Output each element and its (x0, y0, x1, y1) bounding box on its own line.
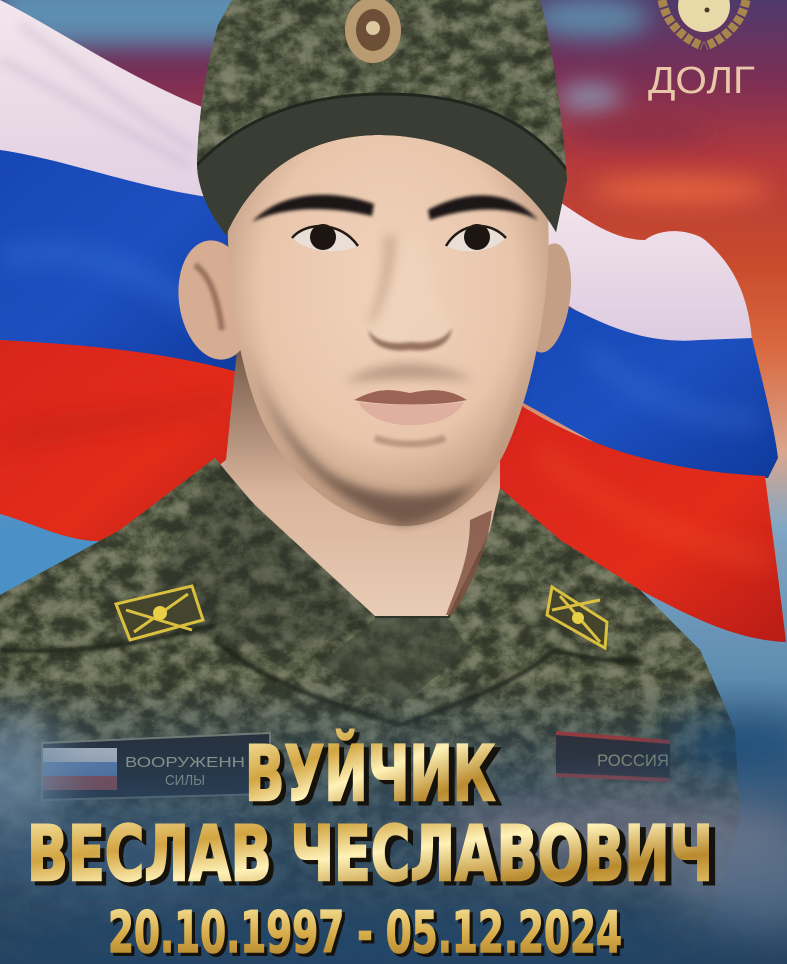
ear: left (171, 235, 261, 365)
flag: right side (490, 192, 786, 642)
moustache shadow (345, 364, 475, 382)
surname: ВУЙЧИК (249, 733, 501, 822)
chest patch: Russia (556, 733, 670, 780)
face (228, 125, 549, 526)
cap (190, 0, 575, 240)
eyebrow: left (252, 195, 374, 222)
jacket shading (150, 458, 375, 650)
logo: ДОЛГ emblem (648, 0, 755, 102)
surname (245, 729, 501, 822)
collar insignia: right (547, 587, 607, 648)
lips (354, 390, 467, 444)
chest patch: Russia: РОССИЯ (597, 751, 669, 770)
chest patch: armed forces (42, 733, 270, 800)
surname: ВУЙЧИК (245, 729, 495, 818)
flag: left side (0, 0, 252, 541)
logo wordmark: ДОЛГ (648, 60, 755, 102)
eye: left (292, 224, 358, 251)
neck (225, 340, 500, 616)
eyebrow: right (428, 195, 538, 220)
chest patch: armed forces: ВООРУЖЕНН (125, 754, 245, 771)
collar insignia: left (116, 586, 203, 640)
eye: right (446, 224, 506, 251)
cap brim (197, 94, 567, 240)
uniform: camouflage jacket (0, 458, 740, 911)
icon: laurel wreath (662, 0, 746, 46)
cap badge (345, 0, 401, 63)
stubble shadow (245, 340, 535, 525)
clouds at bottom (0, 680, 787, 964)
ear: right (519, 240, 577, 356)
nose (368, 235, 452, 351)
chest patch: armed forces: СИЛЫ (165, 772, 205, 789)
